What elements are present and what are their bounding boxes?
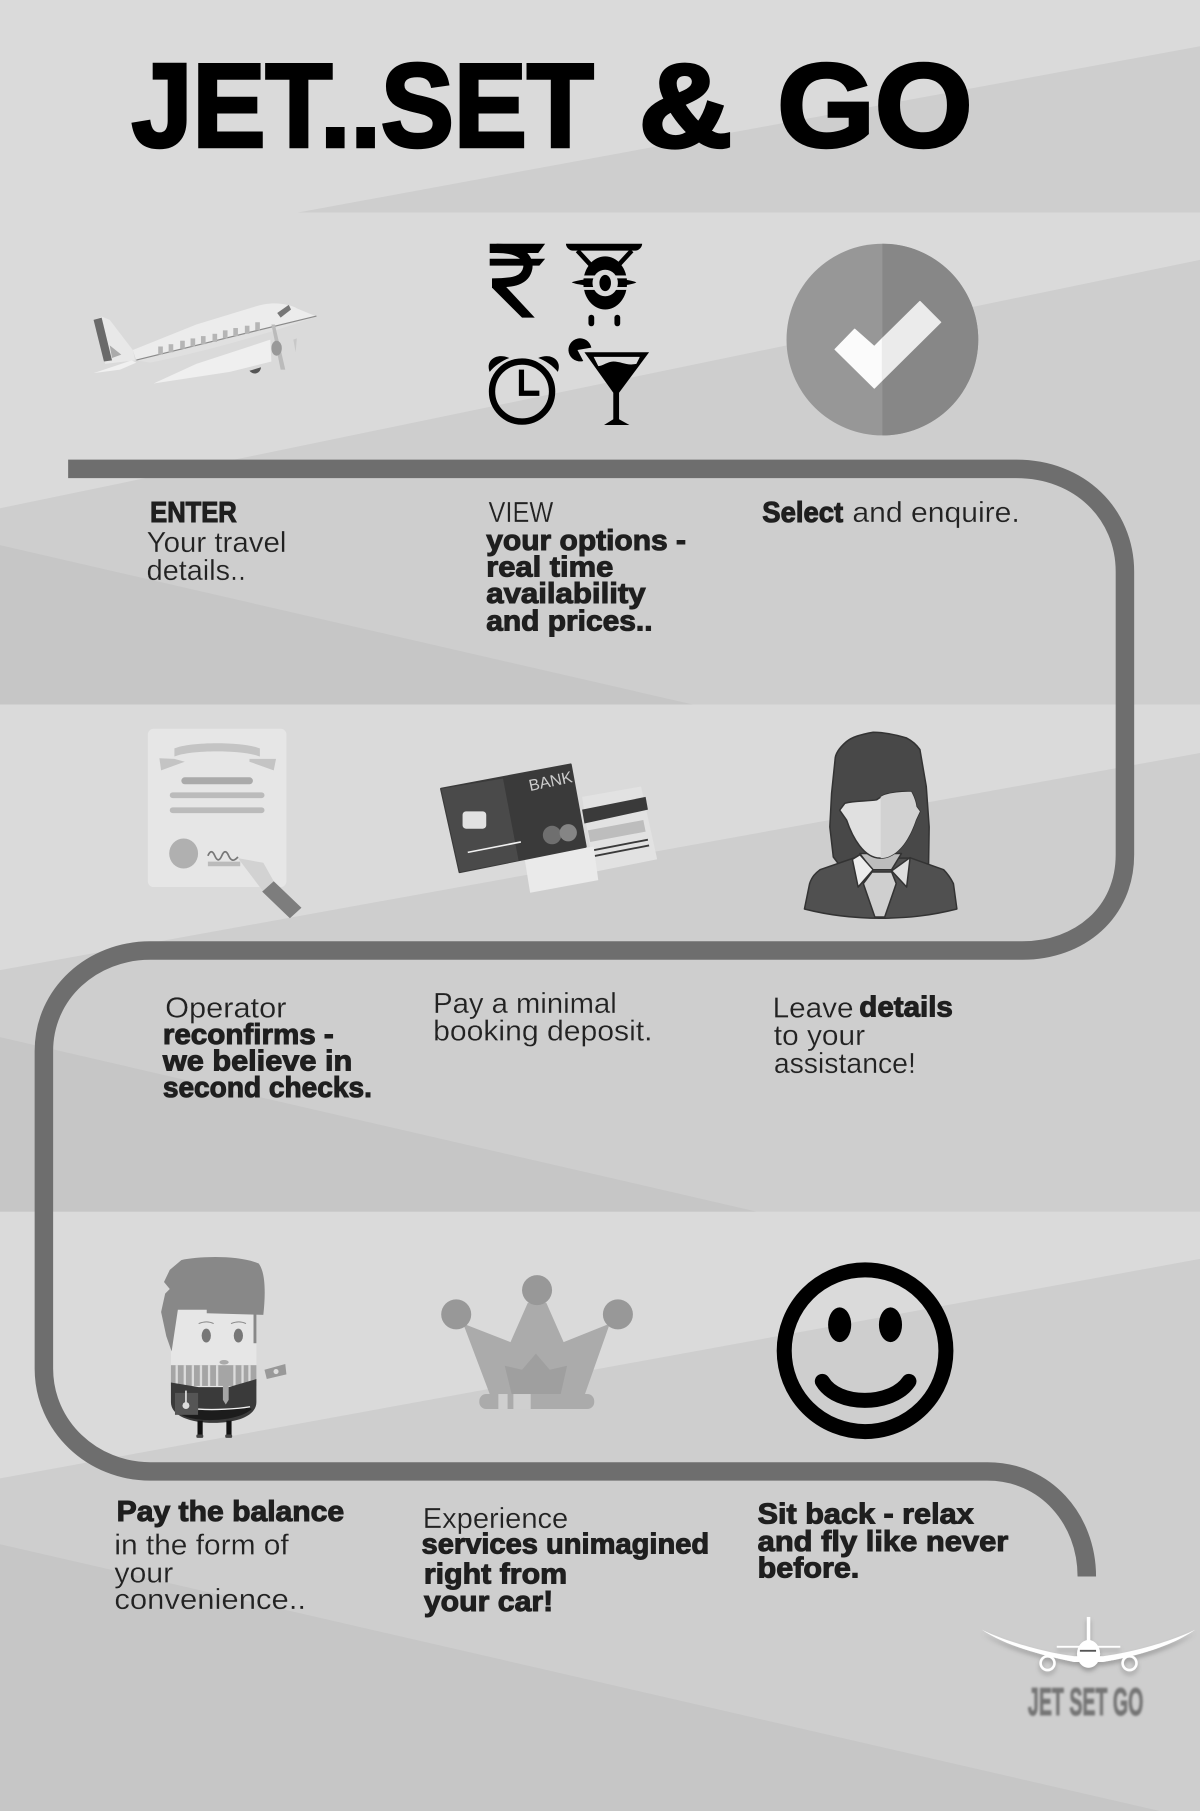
step 2 text: real time [486, 551, 613, 583]
step 8 text: right from [424, 1558, 567, 1590]
step 8 text: Experience [423, 1503, 568, 1535]
step 4 text: reconfirms - [163, 1019, 334, 1051]
step 7 text: your [114, 1557, 174, 1589]
step 7 text [114, 1496, 344, 1616]
icon: smiley [784, 1270, 946, 1432]
step 6 text [773, 991, 953, 1080]
logo: jet set go [982, 1617, 1195, 1724]
title: JET..SET [132, 40, 594, 173]
step 9 text: and fly like never [758, 1526, 1008, 1558]
title [132, 40, 972, 173]
icon: bank cards: BANK [527, 768, 574, 795]
step 3 text: and enquire. [852, 497, 1020, 529]
icon: lamp [566, 244, 642, 326]
step 9 text [758, 1498, 1008, 1585]
step 5 text: Pay a minimal [433, 988, 617, 1020]
step 6 text: to your [774, 1020, 865, 1052]
step 8 text: services unimagined [422, 1528, 709, 1560]
icon: martini [568, 338, 649, 425]
icon: signed certificate [148, 729, 301, 918]
step 5 text: booking deposit. [433, 1016, 653, 1048]
step 5 text [433, 988, 653, 1048]
step 6 text: assistance! [774, 1048, 916, 1080]
icon: crown [441, 1275, 633, 1409]
step 4 text: Operator [165, 993, 287, 1025]
step 2 text: and prices.. [486, 606, 653, 638]
step 9 text: before. [758, 1553, 859, 1585]
step 2 text: your options - [486, 525, 686, 557]
icon: check badge [787, 244, 978, 435]
icon: bank cards [441, 765, 657, 893]
step 2 text [486, 497, 686, 638]
step 7 text: Pay the balance [117, 1496, 344, 1528]
step 6 text: Leave [773, 993, 854, 1025]
title: & [639, 40, 732, 173]
step 4 text: we believe in [162, 1046, 352, 1078]
step 8 text: your car! [424, 1586, 553, 1618]
step 8 text [422, 1503, 709, 1618]
step 4 text [162, 993, 372, 1104]
step 7 text: convenience.. [114, 1584, 306, 1616]
icon: airplane [94, 303, 316, 383]
winding path [44, 469, 1125, 1577]
icon: alarm clock [489, 356, 559, 422]
step 1 text [147, 497, 286, 587]
step 3 text: Select [762, 497, 843, 529]
step 6 text: details [859, 991, 953, 1023]
step 4 text: second checks. [163, 1072, 372, 1104]
step 9 text: Sit back - relax [758, 1498, 974, 1530]
icon: rupee [490, 244, 545, 318]
step 3 text [762, 497, 1020, 529]
title: GO [777, 40, 972, 173]
step 2 text: VIEW [489, 497, 554, 529]
icon: man with money [161, 1257, 286, 1438]
icon: assistant woman [804, 732, 957, 918]
step 2 text: availability [486, 578, 646, 610]
step 1 text: ENTER [150, 497, 237, 529]
step 7 text: in the form of [114, 1530, 290, 1562]
step 1 text: Your travel [147, 527, 286, 559]
step 1 text: details.. [147, 555, 246, 587]
